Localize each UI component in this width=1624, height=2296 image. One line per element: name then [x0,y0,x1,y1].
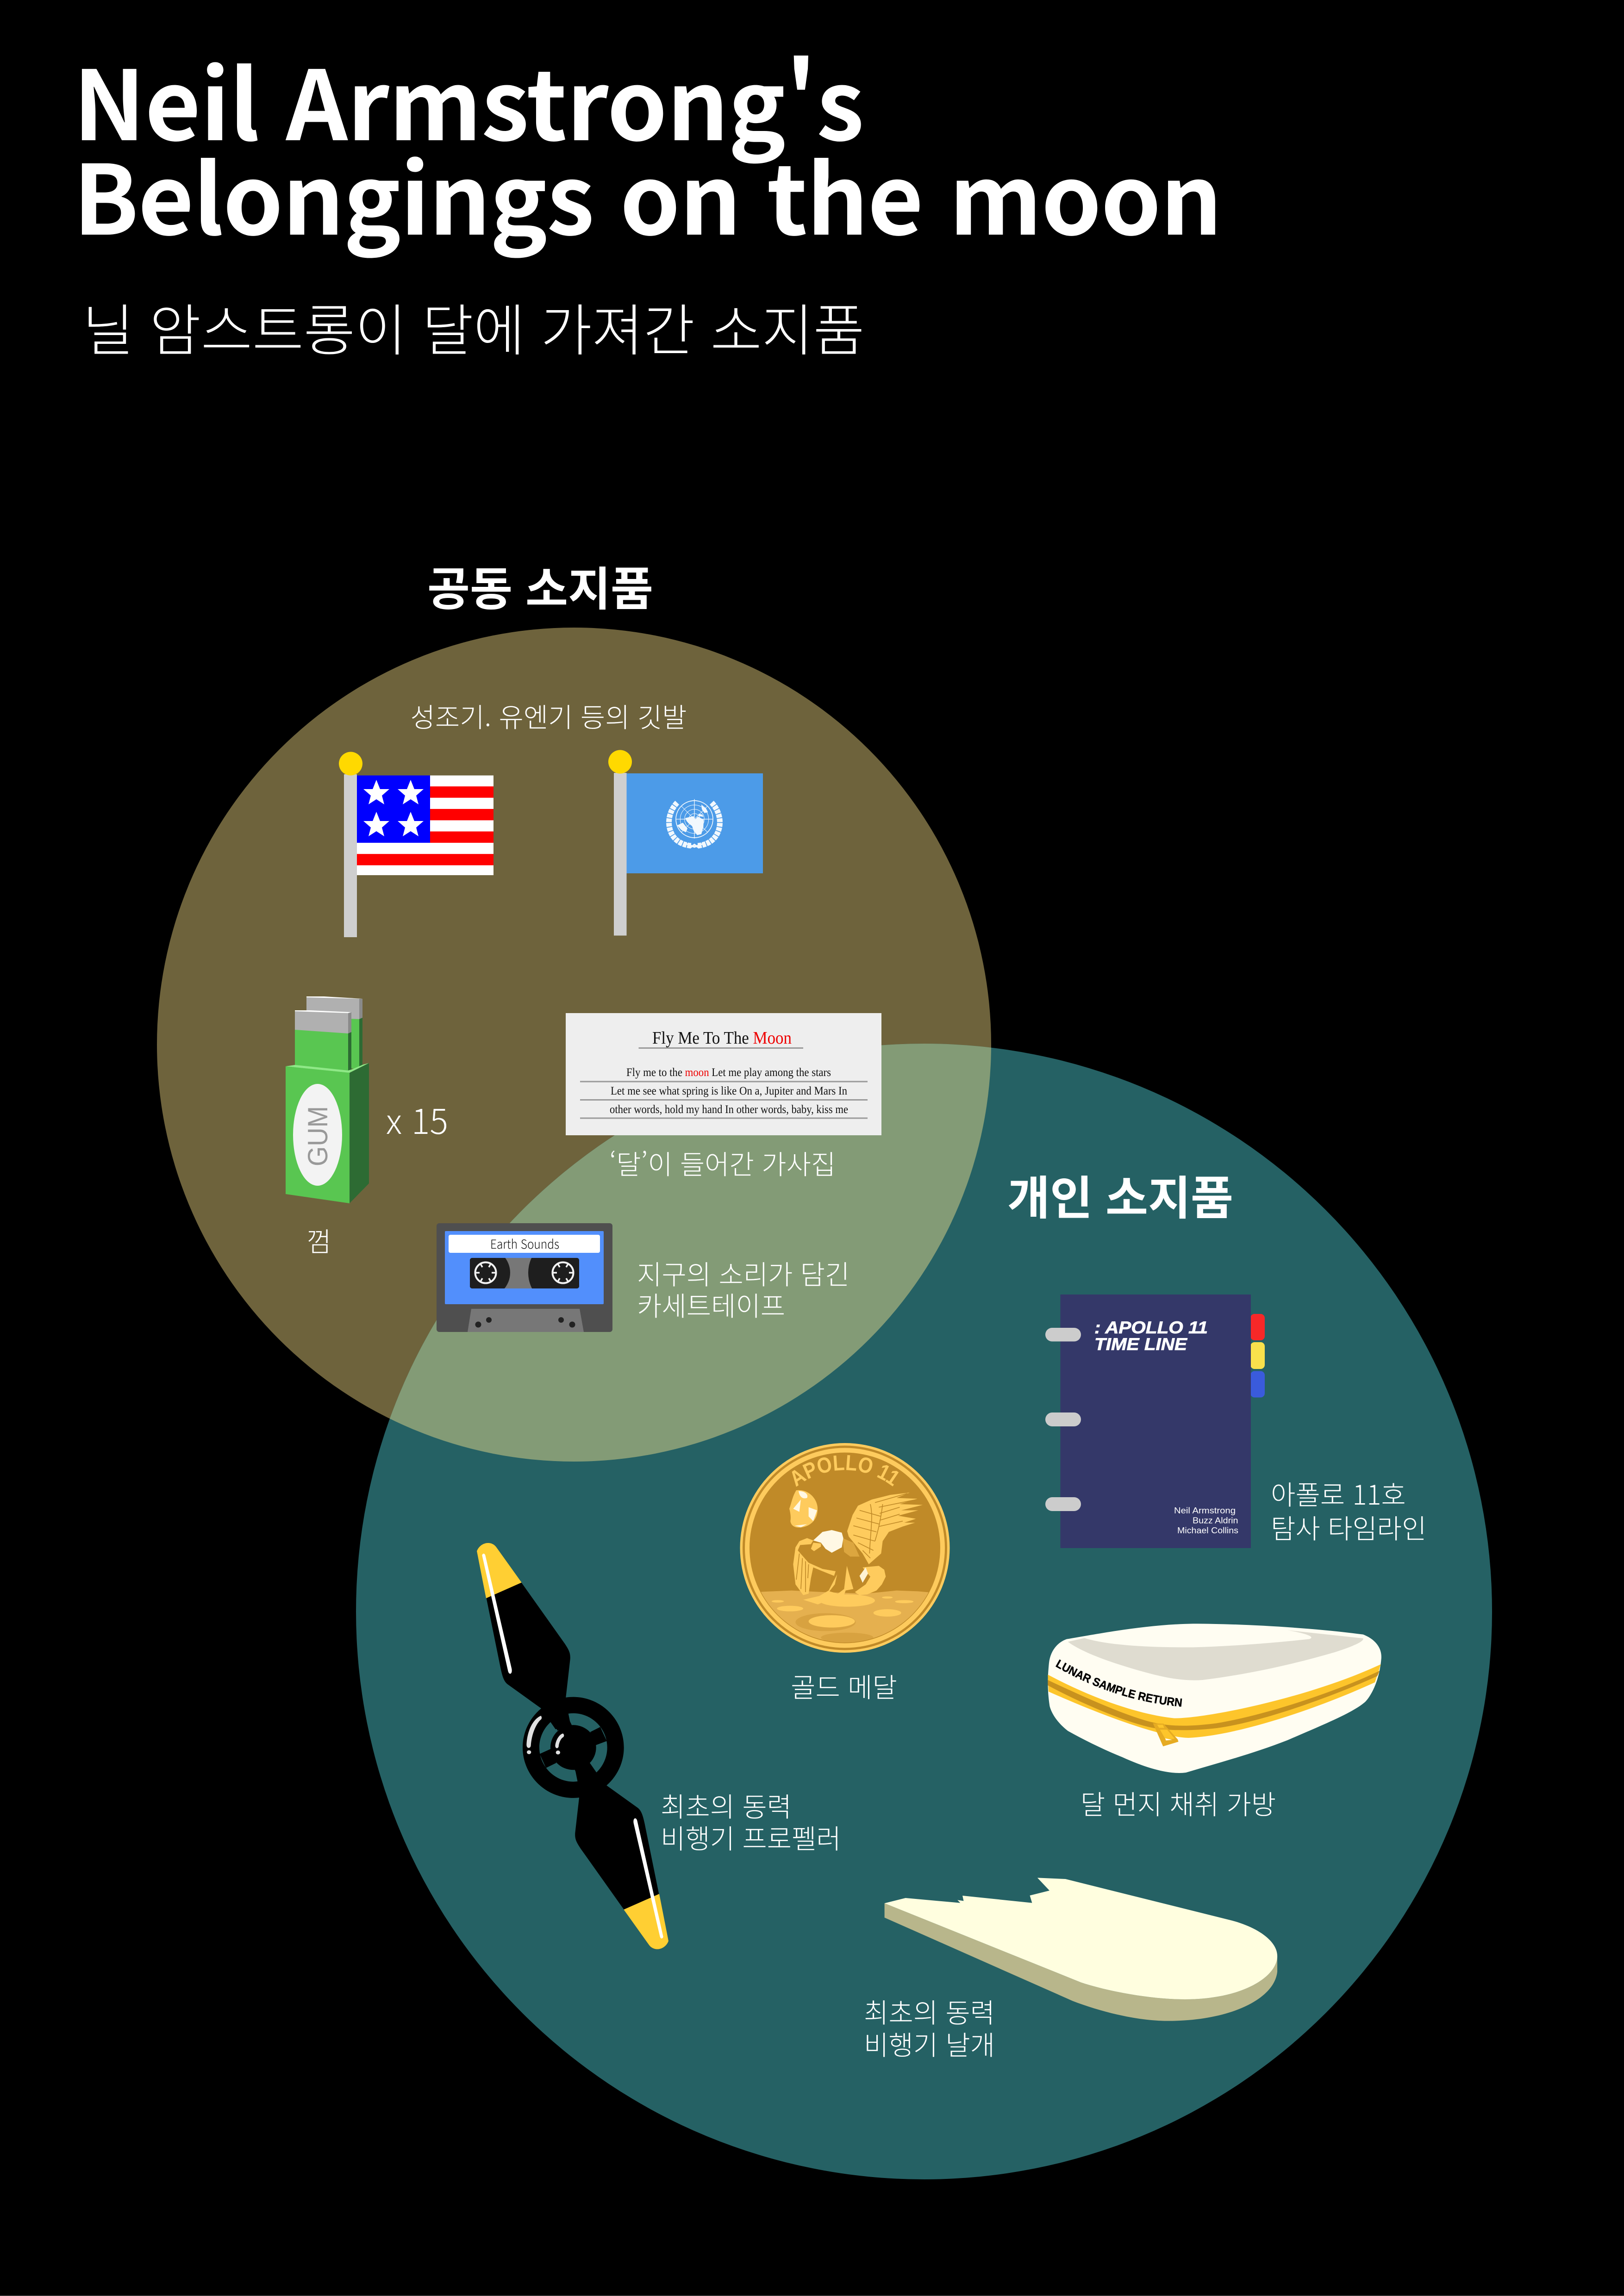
heading: personal belongings: 개인 소지품 [1007,1161,1233,1228]
icon: cassette tape [437,1223,612,1332]
icon: lunar sample return bag: LUNAR SAMPLE RETURN [1054,1657,1183,1710]
heading: shared belongings: 공동 소지품 [427,552,653,619]
icon: UN emblem [669,799,720,848]
caption: binder [1271,1474,1426,1546]
icon: lyric sheet: Let me see what spring is like On a, Jupiter and Mars In [611,1085,847,1097]
caption: wing: 비행기 날개 [864,2024,995,2063]
caption: wing [864,1991,995,2063]
icon: lunar sample return bag [1048,1624,1381,1773]
caption: cassette tape [637,1253,849,1324]
icon: lyric sheet: other words, hold my hand In other words, baby, kiss me [610,1103,848,1116]
icon: Apollo 11 timeline binder: : APOLLO 11 [1094,1318,1208,1337]
caption: propeller [661,1786,841,1856]
eagle wing [847,1493,923,1564]
icon: Apollo 11 timeline binder [1045,1294,1265,1548]
lower blade [575,1763,668,1949]
eagle legs and claws [803,1566,853,1606]
icon: Apollo 11 timeline binder: Michael Collins [1177,1525,1238,1535]
icon: UN flag [608,750,763,936]
caption: lyric sheet: ‘달’이 들어간 가사집 [610,1143,836,1182]
icon: Apollo 11 timeline binder: Buzz Aldrin [1193,1515,1238,1525]
title: Neil Armstrong's [73,29,864,168]
earth [789,1490,818,1528]
caption: binder: 탐사 타임라인 [1271,1507,1426,1546]
front stick [295,1010,351,1074]
title: Belongings on the moon [73,123,1221,262]
propeller highlights [526,1716,564,1755]
caption: wing: 최초의 동력 [864,1991,995,2030]
caption: gold medal: 골드 메달 [791,1666,897,1705]
caption: propeller: 최초의 동력 [661,1786,792,1824]
icon: aircraft wing fragment [885,1878,1277,2021]
icon: propeller [477,1543,668,1949]
subtitle: 닐 암스트롱이 달에 가져간 소지품 [82,286,865,367]
caption: propeller: 비행기 프로펠러 [661,1817,841,1856]
caption: cassette tape: 카세트테이프 [637,1285,785,1324]
label: times fifteen: x 15 [386,1095,448,1144]
icon: lyric sheet: Fly me to the moon Let me play among the stars [626,1066,831,1079]
icon: gold medal [740,1443,950,1661]
caption: cassette tape: 지구의 소리가 담긴 [637,1253,849,1292]
eagle left wing [793,1538,836,1595]
icon: cassette tape: Earth Sounds [490,1234,559,1252]
caption: flags: 성조기. 유엔기 등의 깃발 [411,696,687,735]
eagle head [813,1530,843,1553]
icon: chewing gum pack: GUM [302,1106,333,1166]
caption: lunar bag: 달 먼지 채취 가방 [1081,1783,1276,1822]
venn diagram circles [157,628,1492,2179]
upper blade [477,1543,571,1729]
icon: gold medal: APOLLO 11 [785,1450,904,1491]
icon: chewing gum pack [286,996,369,1203]
icon: lyric sheet: Fly Me To The Moon [652,1028,792,1048]
eagle speckled back [843,1538,860,1556]
icon: Apollo 11 timeline binder: Neil Armstrong [1174,1506,1236,1515]
title [73,29,1221,262]
icon: Apollo 11 timeline binder: TIME LINE [1094,1335,1187,1354]
icon: lyric sheet [566,1013,881,1135]
back stick [306,996,362,1069]
caption: gum: 껌 [306,1220,331,1259]
icon: US flag [339,752,493,937]
caption: binder: 아폴로 11호 [1271,1474,1406,1512]
